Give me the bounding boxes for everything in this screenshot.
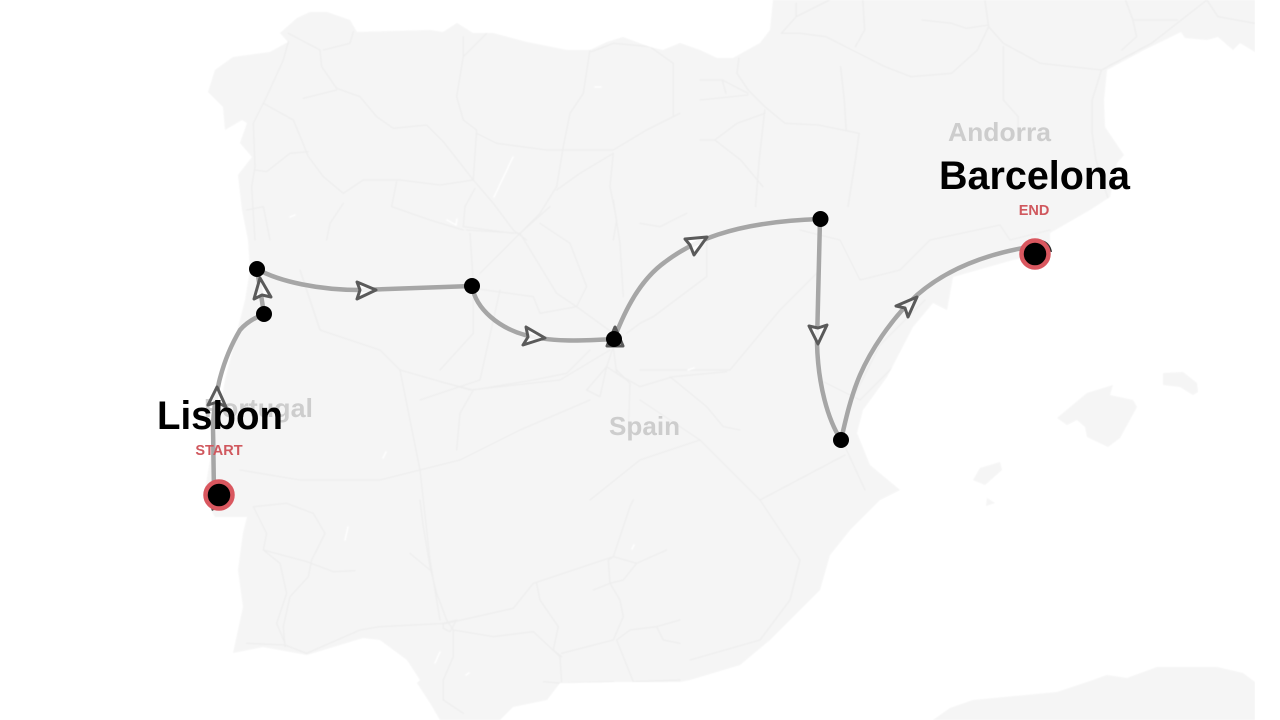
North Africa coast [933,667,1255,720]
waypoint: Porto area [249,261,265,277]
Menorca [1163,372,1198,395]
city label: Lisbon: Lisbon [157,394,283,438]
tag: END: END [1019,203,1049,219]
arrow: leg 2 [254,278,271,299]
road network north-east [700,0,1255,207]
road network south [247,500,680,713]
waypoint: Madrid [606,331,622,347]
road network clipped to land [203,217,1052,511]
map label: Spain: Spain [609,411,680,441]
arrow: leg 1 [208,387,226,407]
road network centre [440,200,740,450]
arrow: leg 4 [523,327,545,345]
road network north-west [247,32,680,240]
hidden arrow behind Madrid waypoint [607,327,623,346]
waypoint: Salamanca area [464,278,480,294]
river and reservoir highlights [455,224,691,370]
end marker: Barcelona [1022,240,1048,268]
start marker: Lisbon [206,482,232,508]
waypoint: Teruel area [812,211,828,227]
hidden arrow behind Barcelona end [1040,240,1052,252]
road network east and lower centre [240,225,1050,660]
Ibiza [974,463,1001,484]
arrow: leg 7 [896,297,917,317]
map label: Portugal: Portugal [204,393,313,423]
waypoint: Valencia [833,432,849,448]
city label: Barcelona: Barcelona [939,154,1131,198]
hidden arrow behind Lisbon start [207,498,218,511]
arrow: leg 6 [809,325,827,344]
route line from Lisbon to Barcelona [213,219,1035,494]
waypoint: Coimbra area [256,306,272,322]
Mallorca [1057,385,1137,447]
map label: Andorra: Andorra [948,117,1052,147]
Formentera [987,500,993,505]
arrow: leg 3 [357,282,376,299]
arrow: leg 5 [685,237,707,255]
tag: START: START [195,443,243,459]
